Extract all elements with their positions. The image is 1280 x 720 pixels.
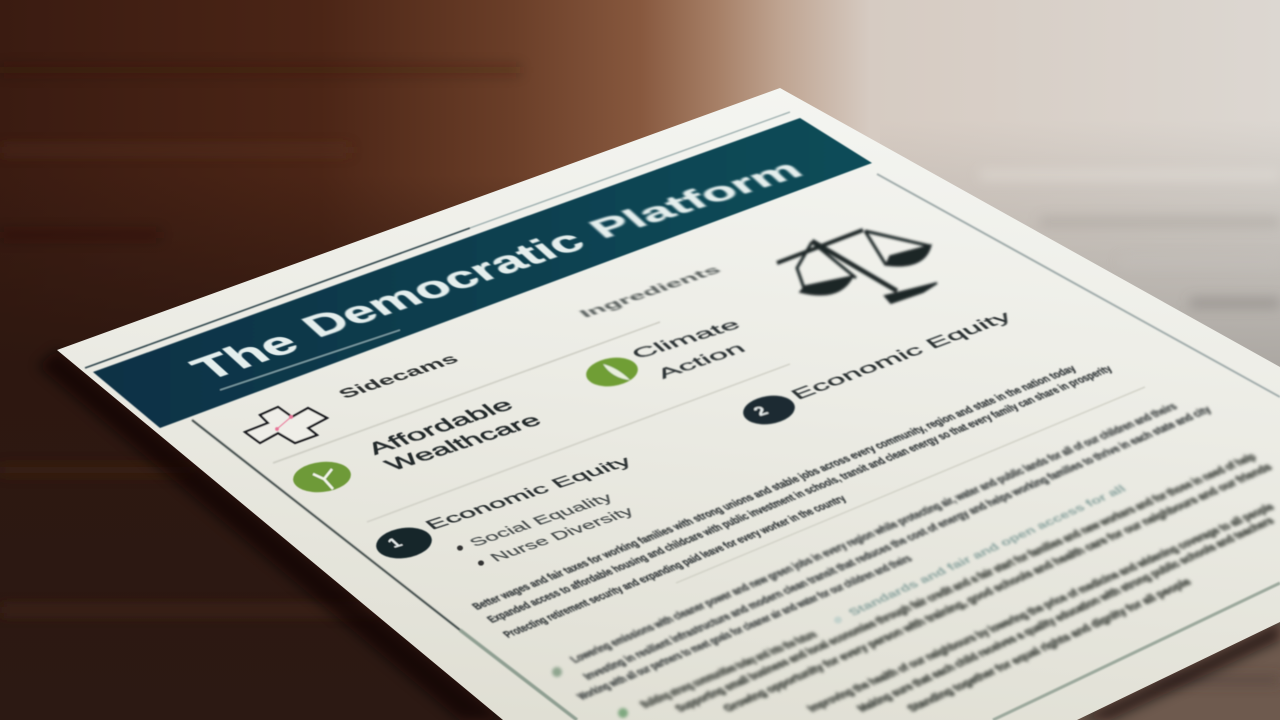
icon: number 2 <box>741 393 797 427</box>
heading: Climate Action: Action <box>652 340 750 381</box>
icon: medical cross <box>245 407 327 443</box>
title: The <box>181 324 308 387</box>
heading: Affordable Wealthcare: Affordable <box>362 395 519 458</box>
icon: balance scales <box>777 230 937 303</box>
icon: green leaf <box>584 355 640 389</box>
body text: lower paragraphs <box>552 451 1277 718</box>
block: Economic Equity left: Nurse Diversity <box>487 505 638 565</box>
block: Economic Equity left <box>421 453 638 566</box>
heading: Affordable Wealthcare: Wealthcare <box>380 411 547 474</box>
body text: upper paragraph: Protecting retirement security and expanding paid leave for every worker in the country <box>500 493 850 640</box>
block: Economic Equity left: Economic Equity <box>421 453 636 533</box>
icon: number 2: 2 <box>749 404 772 419</box>
paper shadow <box>38 350 1280 720</box>
icon: number 1 <box>374 524 434 562</box>
body text: middle paragraph: Working with all our partners to meet goals for cleaner air and water for our children and theirs <box>574 553 915 702</box>
block: Economic Equity left: Social Equality <box>466 491 617 550</box>
icon: number 1: 1 <box>384 535 406 551</box>
heading: Economic Equity right: Economic Equity <box>787 308 1017 403</box>
icon: green circle <box>292 459 352 495</box>
inner border lines <box>192 174 1280 720</box>
section label: left: Sidecams <box>333 351 463 402</box>
heading: Climate Action: Climate <box>626 316 745 361</box>
section label: centre: Ingredients <box>576 263 725 320</box>
body text: lower paragraphs: Building strong communities today and into the future <box>637 629 820 710</box>
body text: teal note: Standards and fair and open access for all <box>845 483 1129 618</box>
title <box>181 155 811 387</box>
title: Platform <box>581 155 811 244</box>
heading: Climate Action <box>626 316 750 381</box>
body text: lower paragraphs: Standing together for equal rights and dignity for all people <box>904 576 1194 714</box>
header band <box>85 112 872 428</box>
title: Democratic <box>294 224 594 344</box>
heading: Affordable Wealthcare <box>362 395 547 474</box>
